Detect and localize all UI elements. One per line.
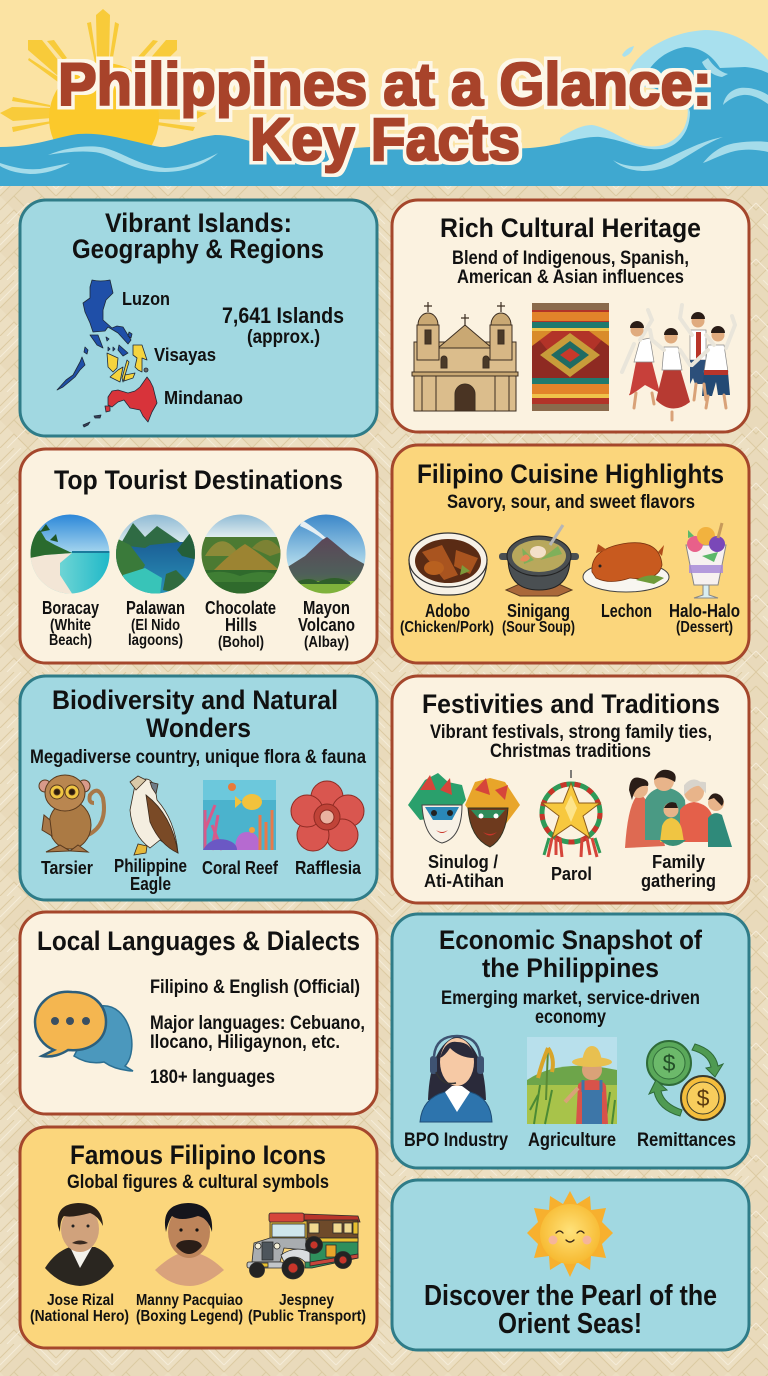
- figure labels: Jespney: [279, 1292, 334, 1309]
- festival labels: [424, 852, 716, 891]
- subtitle: [441, 988, 700, 1028]
- subtitle: [430, 722, 712, 762]
- language facts: Major languages: Cebuano,: [150, 1013, 365, 1034]
- stat: island count: 7,641 Islands: [222, 303, 344, 328]
- subtitle: Christmas traditions: [490, 741, 651, 762]
- icon: philippine eagle: [130, 776, 178, 855]
- stat: island count: (approx.): [247, 327, 320, 348]
- subtitle: [452, 248, 689, 288]
- closing message: Discover the Pearl of the: [424, 1280, 717, 1312]
- panel: biodiversity: [20, 676, 377, 900]
- dish labels: Lechon: [601, 601, 652, 621]
- icon: smiling sun: [527, 1191, 613, 1277]
- figure labels: (Public Transport): [248, 1308, 366, 1325]
- festival labels: gathering: [641, 871, 716, 891]
- panel: cultural heritage: [392, 200, 749, 432]
- species labels: Coral Reef: [202, 858, 279, 878]
- destination labels: Volcano: [298, 615, 355, 635]
- figure labels: Jose Rizal: [47, 1292, 114, 1309]
- destination labels: Hills: [225, 615, 257, 635]
- icon: folk dancers: [622, 305, 735, 420]
- destination labels: [42, 598, 355, 651]
- panel: cuisine: [392, 445, 749, 663]
- light wave shell: [560, 30, 768, 150]
- subtitle: Blend of Indigenous, Spanish,: [452, 248, 689, 269]
- map labels: [122, 289, 243, 408]
- heading: Economic Snapshot: the Philippines: [482, 953, 659, 983]
- icon: rice farmer: [527, 1037, 617, 1124]
- figure labels: (Boxing Legend): [136, 1308, 243, 1325]
- heading: Rich Cultural Heritage: Rich Cultural Heritage: [440, 213, 701, 243]
- language facts: [150, 977, 365, 1088]
- closing message: Orient Seas!: [498, 1308, 642, 1340]
- icon: rafflesia: [291, 781, 364, 851]
- dish labels: Adobo: [425, 601, 470, 621]
- figure labels: Manny Pacquiao: [136, 1292, 243, 1309]
- icon: sinigang pot: [499, 525, 579, 596]
- economy labels: Remittances: [637, 1130, 736, 1151]
- heading: Filipino Cuisine Highlights: Filipino Cuisine Highlights: [417, 459, 724, 489]
- icon: jeepney: [247, 1213, 360, 1279]
- icon: church: [412, 302, 518, 411]
- economy labels: [404, 1130, 736, 1151]
- photo: Palawan lagoons: [116, 514, 198, 596]
- economy labels: Agriculture: [528, 1130, 616, 1151]
- subtitle: Megadiverse country, unique flora & fauna: [30, 747, 366, 768]
- species labels: Rafflesia: [295, 858, 362, 878]
- panel: festivities: [392, 676, 749, 903]
- subtitle: Global figures & cultural symbols: [67, 1172, 329, 1193]
- icon: speech bubbles: [35, 992, 133, 1071]
- icon: adobo bowl: [409, 533, 487, 595]
- subtitle: American & Asian influences: [457, 267, 684, 288]
- species labels: Tarsier: [41, 858, 93, 878]
- language facts: 180+ languages: [150, 1067, 275, 1088]
- wave body: [0, 47, 768, 186]
- icon: call center agent: [420, 1036, 492, 1122]
- panel: economy: [392, 914, 749, 1168]
- icon: festival masks: [408, 773, 520, 847]
- heading: Local Languages & Dialects: Local Languages & Dialects: [37, 926, 360, 956]
- map of the Philippines: [57, 280, 157, 427]
- destination labels: Boracay: [42, 598, 99, 618]
- heading: Vibrant Islands: Vibrant Islands:: [105, 208, 292, 238]
- destination labels: lagoons): [128, 632, 183, 649]
- dish labels: Sinigang: [507, 601, 570, 621]
- photo: Mayon Volcano: [286, 514, 368, 596]
- main title: Philippines at a Glance:: [58, 51, 712, 118]
- main title: [58, 51, 712, 173]
- destination labels: Beach): [49, 632, 92, 649]
- water droplet: [622, 46, 634, 57]
- destination labels: (Albay): [304, 634, 349, 651]
- heading: Vibrant Islands: Geography & Regions: [72, 234, 324, 264]
- heading: Biodiversity: Biodiversity and Natural: [52, 685, 338, 715]
- language facts: Ilocano, Hiligaynon, etc.: [150, 1032, 340, 1053]
- economy labels: BPO Industry: [404, 1130, 508, 1151]
- closing message: [424, 1280, 717, 1340]
- icon: remittance coins: $: [697, 1085, 710, 1111]
- heading: Biodiversity: Wonders: [146, 713, 251, 743]
- destination labels: Palawan: [126, 598, 185, 618]
- icon: halo-halo: [686, 523, 726, 598]
- portrait: Manny Pacquiao: [155, 1203, 224, 1286]
- panel: geography: [20, 200, 377, 436]
- wave highlights: [0, 58, 768, 174]
- icon: parol lantern: [542, 770, 600, 857]
- panel: closing call to action: [392, 1180, 749, 1350]
- stat: island count: [222, 303, 344, 348]
- portrait: Jose Rizal: [45, 1203, 114, 1286]
- heading: Famous Filipino Icons: Famous Filipino Icons: [70, 1140, 326, 1170]
- icon: sun with rays: [0, 9, 207, 146]
- festival labels: Parol: [551, 864, 592, 884]
- icon: coral reef: [203, 780, 276, 850]
- map labels: Luzon: [122, 289, 170, 309]
- heading: Economic Snapshot: Economic Snapshot of: [439, 925, 703, 955]
- heading: Festivities and Traditions: Festivities and Traditions: [422, 689, 720, 719]
- header banner: [0, 0, 768, 186]
- icon: remittance coins: $: [663, 1050, 676, 1076]
- dish labels: (Sour Soup): [502, 619, 575, 636]
- dish labels: [400, 601, 740, 636]
- dish labels: Halo-Halo: [669, 601, 740, 621]
- destination labels: Mayon: [303, 598, 350, 618]
- species labels: Eagle: [130, 874, 171, 894]
- species labels: Philippine: [114, 856, 187, 876]
- subtitle: Savory, sour, and sweet flavors: [447, 492, 695, 513]
- festival labels: Family: [652, 852, 705, 872]
- heading: Biodiversity: [52, 685, 338, 743]
- heading: Economic Snapshot: [439, 925, 703, 983]
- icon: remittance coins: [647, 1041, 725, 1120]
- map labels: Visayas: [154, 345, 216, 365]
- destination labels: (White: [50, 617, 91, 634]
- language facts: Filipino & English (Official): [150, 977, 360, 998]
- dish labels: (Chicken/Pork): [400, 619, 494, 636]
- icon: woven textile: [532, 303, 609, 411]
- icon: lechon: [583, 543, 669, 592]
- festival labels: Ati-Atihan: [424, 871, 504, 891]
- map labels: Mindanao: [164, 388, 243, 408]
- subtitle: economy: [535, 1007, 606, 1028]
- panel: tourist destinations: [20, 449, 377, 663]
- panel: languages: [20, 912, 377, 1114]
- dish labels: (Dessert): [676, 619, 733, 636]
- icon: tarsier: [39, 775, 104, 852]
- figure labels: [30, 1292, 366, 1325]
- main title: Key Facts: [250, 106, 520, 173]
- festival labels: Sinulog /: [428, 852, 498, 872]
- icon: family gathering: [625, 770, 732, 848]
- figure labels: (National Hero): [30, 1308, 129, 1325]
- destination labels: Chocolate: [205, 598, 276, 618]
- photo: Chocolate Hills: [201, 514, 282, 596]
- panel: famous icons: [20, 1127, 377, 1348]
- subtitle: Emerging market, service-driven: [441, 988, 700, 1009]
- subtitle: Vibrant festivals, strong family ties,: [430, 722, 712, 743]
- species labels: [41, 856, 362, 894]
- destination labels: (El Nido: [131, 617, 180, 634]
- heading: Top Tourist Destinations: Top Tourist Destinations: [54, 465, 343, 495]
- destination labels: (Bohol): [218, 634, 264, 651]
- heading: Vibrant Islands: [72, 208, 324, 264]
- photo: Boracay beach: [30, 514, 110, 596]
